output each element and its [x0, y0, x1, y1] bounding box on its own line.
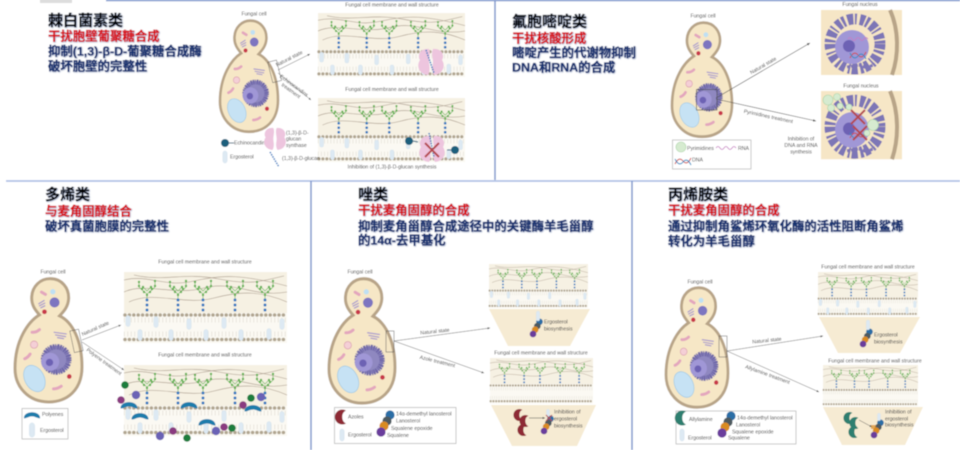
membrane: polyene treated: Fungal cell membrane and wall structure	[158, 352, 252, 358]
panel heading group: 通过抑制角鲨烯环氧化酶的活性阻断角鲨烯	[668, 218, 903, 234]
nucleus: natural state: Fungal nucleus	[842, 2, 878, 8]
panel heading group: DNA和RNA的合成	[512, 60, 615, 74]
membrane: azole treated: Inhibition of	[554, 410, 581, 416]
arrows	[727, 336, 823, 392]
membrane: natural state	[318, 2, 465, 77]
legend: glucan	[286, 136, 301, 142]
panel heading group	[512, 12, 636, 74]
fungal cell: Fungal cell	[687, 280, 713, 286]
legend: 14α-demethyl lanosterol	[396, 412, 451, 418]
membrane: azole treated	[490, 350, 596, 446]
legend: Ergosterol	[348, 432, 372, 438]
arrow labels: Pyrimidines treatment	[743, 109, 794, 125]
panel heading group: 唑类	[358, 186, 388, 204]
legend: Azoles	[348, 414, 364, 420]
arrow labels: Natural state	[752, 336, 782, 346]
legend: RNA	[738, 146, 749, 152]
arrow labels	[275, 50, 309, 100]
membrane: natural state	[818, 264, 920, 353]
membrane: natural state: Ergosterol	[544, 320, 568, 326]
arrow labels: Inhibition of	[788, 136, 815, 142]
membrane: inhibited: Fungal cell membrane and wall structure	[345, 87, 439, 93]
arrows	[716, 43, 816, 121]
legend: synthase	[286, 143, 307, 149]
legend: 14α-demethyl lanosterol	[737, 416, 792, 422]
legend: Allylamine	[689, 417, 713, 423]
panel heading group: 转化为羊毛甾醇	[668, 234, 755, 248]
panel heading group: 干扰胞壁葡聚糖合成	[48, 28, 160, 44]
arrow labels	[81, 320, 123, 377]
membrane: natural state: Fungal cell membrane and wall structure	[345, 2, 439, 8]
fungal cell	[666, 280, 728, 407]
nucleus: treated	[821, 84, 902, 159]
fungal cell	[15, 270, 83, 402]
panel heading group: 嘧啶产生的代谢物抑制	[512, 45, 636, 60]
membrane: natural state	[489, 264, 590, 346]
membrane: allylamine treated: ergosterol	[885, 416, 908, 422]
legend: DNA	[692, 158, 703, 164]
fungal cell	[672, 14, 732, 137]
arrow labels: Natural state	[81, 320, 110, 338]
legend: Echinocandins	[234, 140, 268, 146]
membrane: natural state: biosynthesis	[544, 326, 573, 332]
arrows	[82, 325, 124, 370]
legend	[334, 408, 456, 444]
panel heading group: 抑制(1,3)-β-D-葡聚糖合成酶	[48, 44, 202, 58]
panel heading group: 氟胞嘧啶类	[512, 12, 587, 30]
legend: Ergosterol	[688, 436, 712, 442]
membrane: allylamine treated	[823, 358, 923, 445]
panel heading group: 破坏胞壁的完整性	[48, 58, 147, 74]
fungal cell	[220, 12, 282, 132]
fungal cell: Fungal cell	[690, 14, 716, 20]
legend	[672, 140, 751, 169]
arrow labels	[419, 327, 456, 369]
membrane: natural state: Ergosterol	[874, 332, 898, 338]
legend	[221, 128, 320, 167]
legend: Squalene epoxide	[732, 430, 774, 436]
arrow labels: Polyene treatment	[85, 347, 123, 377]
panel: 氟胞嘧啶类	[512, 2, 902, 169]
arrow labels: Natural state	[275, 50, 304, 68]
panel heading group: 干扰麦角固醇的合成	[358, 202, 470, 218]
fungal cell: Fungal cell	[347, 270, 373, 276]
arrow labels: treatment	[280, 82, 302, 100]
fungal cell	[329, 270, 395, 403]
membrane: allylamine treated: biosynthesis	[885, 422, 914, 428]
membrane: natural state: Fungal cell membrane and wall structure	[158, 260, 252, 266]
panel heading group: 丙烯胺类	[668, 186, 728, 204]
panel heading group: 的14α-去甲基化	[358, 232, 446, 248]
panel heading group: 与麦角固醇结合	[45, 204, 132, 218]
legend: Polyenes	[42, 412, 64, 418]
legend: (1,3)-β-D-glucan	[282, 156, 320, 162]
membrane: natural state: Fungal cell membrane and wall structure	[821, 264, 915, 270]
arrow labels: Natural state	[749, 56, 778, 76]
arrow labels: Natural state	[420, 327, 450, 337]
membrane: natural state: biosynthesis	[874, 340, 903, 346]
legend: Squalene	[387, 433, 409, 439]
legend: Squalene epoxide	[391, 426, 433, 432]
fungal cell: Fungal cell	[40, 270, 66, 276]
membrane: azole treated: biosynthesis	[554, 424, 583, 430]
panel heading group	[358, 186, 593, 248]
membrane: azole treated: ergosterol	[554, 416, 577, 422]
panel heading group: 抑制麦角甾醇合成途径中的关键酶羊毛甾醇	[358, 218, 593, 234]
legend: Ergosterol	[40, 428, 64, 434]
panel: 丙烯胺类	[666, 186, 923, 445]
panel: 多烯类	[15, 186, 287, 442]
membrane: natural state	[124, 260, 287, 343]
fungal cell: Fungal cell	[241, 12, 267, 18]
corner shadow	[40, 0, 72, 3]
panel heading group: 干扰核酸形成	[512, 30, 586, 46]
arrow labels	[743, 56, 818, 155]
panel: 棘白菌素类	[48, 2, 465, 170]
panel heading group: 破坏真菌胞膜的完整性	[45, 218, 169, 234]
legend: (1,3)-β-D-	[286, 130, 309, 136]
arrows	[394, 328, 490, 373]
arrow labels: DNA and RNA	[784, 143, 818, 149]
legend: Lanosterol	[396, 418, 420, 424]
legend: Squalene	[728, 436, 750, 442]
panel heading group: 棘白菌素类	[48, 12, 123, 30]
nucleus: natural state	[821, 2, 902, 75]
legend: Lanosterol	[736, 422, 760, 428]
arrow labels: Azole treatment	[419, 355, 456, 369]
arrow labels: Echinocandins	[278, 74, 309, 99]
membrane: allylamine treated: Fungal cell membrane and wall structure	[828, 358, 922, 364]
membrane: allylamine treated: Inhibition of	[885, 410, 912, 416]
arrow labels: Allylamine treatment	[744, 364, 791, 386]
panel heading group: 干扰麦角固醇的合成	[668, 202, 780, 218]
legend: Ergosterol	[230, 154, 254, 160]
membrane: inhibited	[318, 87, 465, 170]
legend: Pyrimidines	[687, 146, 714, 152]
panel: 唑类	[329, 186, 596, 446]
membrane: polyene treated	[117, 352, 287, 442]
membrane: inhibited: Inhibition of (1,3)-β-D-glucan synthesis	[348, 164, 437, 170]
membrane: azole treated: Fungal cell membrane and wall structure	[494, 350, 588, 356]
panel heading group	[668, 186, 903, 248]
panel heading group	[45, 186, 169, 234]
panel heading group: 多烯类	[45, 186, 90, 204]
arrow labels	[744, 336, 791, 386]
panel heading group	[48, 12, 202, 74]
arrow labels: synthesis	[790, 150, 812, 156]
legend	[675, 410, 796, 444]
arrows: natural state and treatment	[278, 54, 311, 100]
nucleus: treated: Fungal nucleus	[843, 84, 879, 90]
legend	[22, 408, 68, 439]
